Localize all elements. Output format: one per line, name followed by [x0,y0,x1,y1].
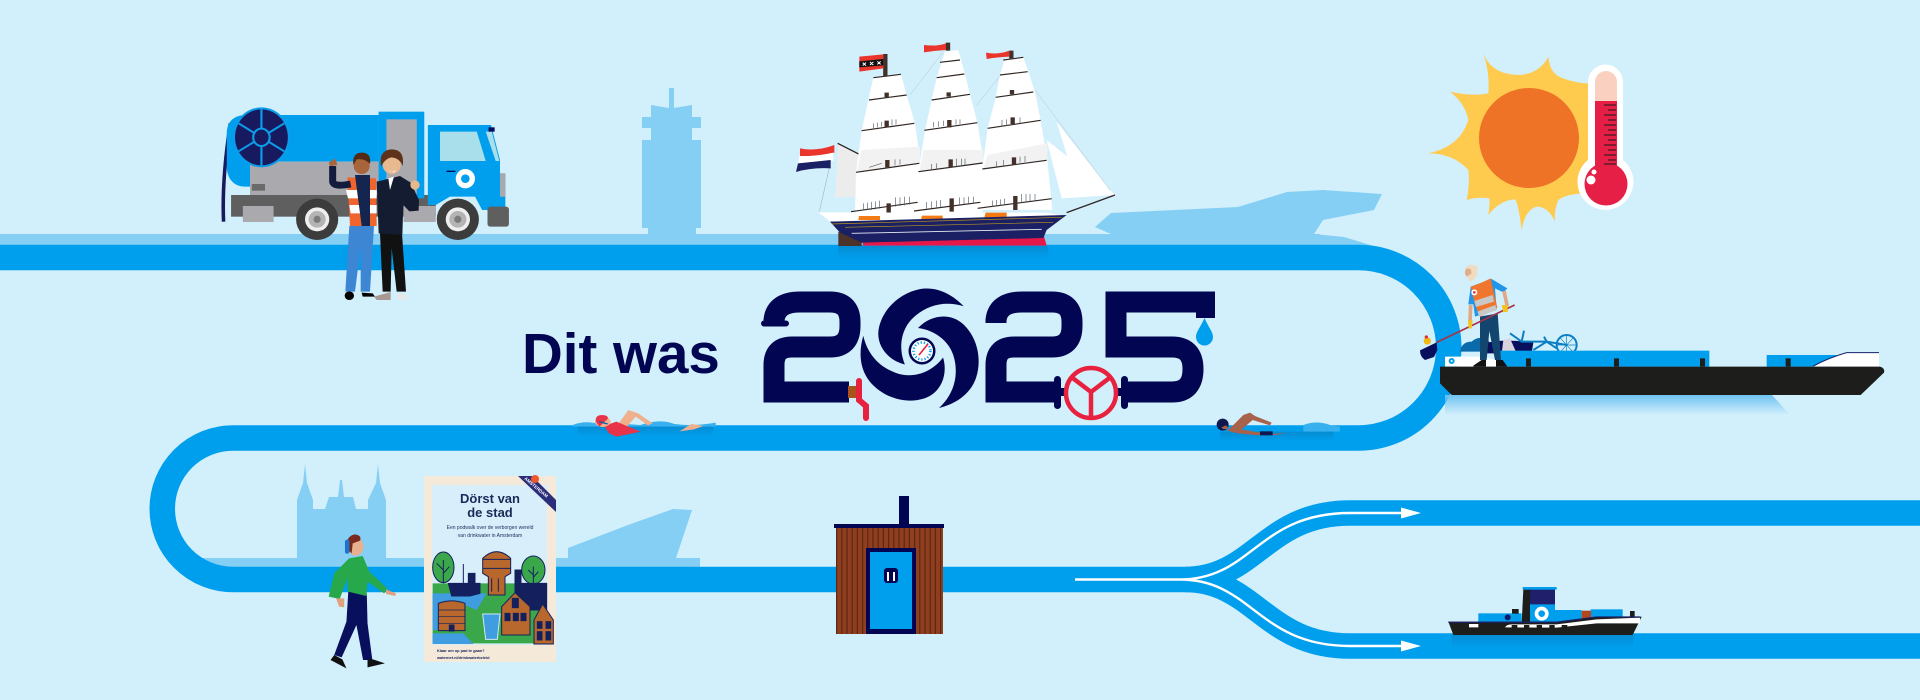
barge reflection [1445,395,1790,415]
water pipe main route [0,258,1920,646]
person with headphones [329,534,396,668]
barge hull [1440,367,1884,395]
head [1465,266,1477,278]
cabin wall [836,527,943,634]
silhouette: tower [642,88,701,246]
flanges [1054,376,1128,409]
tug deck house [1478,613,1522,628]
tug hull [1448,617,1642,635]
tug funnel [1522,587,1557,623]
bicycle [1510,331,1577,355]
amsterdam flag [859,54,883,72]
arrowhead lower [1401,640,1421,652]
poster fortress [515,570,547,610]
sweater [329,556,387,599]
rubbish load [1460,331,1577,355]
poster subtitle: Een podwalk over de verborgen wereld [447,525,534,531]
truck [223,107,509,240]
shoes [331,655,385,668]
poster water tower [483,552,511,595]
sails mast 2 [915,50,984,213]
cargo hold [1500,351,1709,367]
year logo 2025 [764,272,1215,418]
worker with net [1420,265,1515,367]
tug shadow [1452,635,1633,648]
boots [1473,360,1507,367]
poster title: Dörst van [460,491,520,506]
poster water glass [483,614,500,639]
pole [1437,305,1515,342]
jib sails [1047,140,1115,198]
rudder [838,232,862,246]
poster ribbon: AMSTERDAM [523,476,549,499]
rigging details [863,117,1035,210]
poster tug [448,564,480,596]
swirl digit 0 [843,272,979,416]
tap spout on 5 [1196,310,1215,318]
sun disc [1479,88,1579,188]
water drop [1196,318,1213,346]
pressure gauge [908,338,936,364]
poster: Dorst van de stad: de stad [467,505,513,520]
poster illustration [433,552,553,644]
deck and orange boats [818,212,1063,222]
hose reel [233,107,290,167]
digit 5 [1116,302,1215,392]
vest [1471,278,1497,317]
digit 2 left [774,302,850,392]
hull navy [830,215,1067,243]
thermometer [1578,64,1634,210]
pennant flags [924,43,946,52]
spars [851,57,1052,212]
arrowhead upper [1401,508,1421,518]
sails mast 1 [855,74,921,213]
pipe branch lower [1185,580,1920,646]
worker in orange vest [329,153,377,300]
door [866,548,916,634]
swimmer dark [1217,413,1340,442]
arrows: flow fork [1075,508,1421,652]
barge [1440,331,1884,395]
head [348,538,363,556]
poster trees [433,552,545,584]
hull red [862,232,1047,246]
digit 2 right [996,302,1072,392]
hull shadow [838,246,1048,259]
sun rays [1428,53,1588,230]
silhouette: ship-shaped building [1095,190,1400,270]
chimney [899,496,909,526]
tall ship [796,43,1115,259]
skyline silhouettes top [0,88,1400,270]
trousers [334,592,372,660]
tug boat [1448,587,1642,648]
shirt and arms [1468,279,1507,317]
poster silo [438,601,465,631]
gloves [1502,305,1508,312]
tug logo [1535,607,1549,621]
skyline silhouettes bottom [202,464,700,568]
man in dark suit [374,149,420,300]
stern cabin [1767,353,1879,367]
red valve wheel [1066,368,1116,418]
net [1420,342,1437,360]
poster: Dorst van de stad: waternet.nl/drinkwaterbeleid [436,655,490,660]
poster ribbon [518,475,556,512]
trash in net [1424,335,1431,345]
truck wheel rear [296,199,338,240]
poster: Dorst van de stad [424,475,556,662]
silhouette: church [297,464,386,558]
hands [336,589,396,607]
sails mast 3 [978,57,1052,210]
pants [1480,313,1501,360]
masts [885,43,1015,213]
headphones [341,542,353,552]
red tap [848,381,866,418]
swimmer red [573,410,716,437]
pipe nozzle left [764,320,786,326]
poster house small [534,604,553,644]
silhouette: science museum [568,509,692,558]
roof [834,524,944,528]
poster house [502,593,530,635]
poster: Dorst van de stad: van drinkwater in Amsterdam [458,533,522,539]
toilet cabin [834,496,944,634]
truck logo [456,169,475,188]
thermometer bulb [1584,162,1628,206]
bow cabin [1445,357,1500,367]
restroom icon [884,568,898,583]
truck wheel front [437,199,479,240]
poster footer: Klaar om op pad te gaan? [437,648,485,653]
sun [1428,53,1588,230]
two workers [329,149,420,300]
heading: Dit was: Dit was [522,322,720,385]
dutch flag [796,145,834,172]
